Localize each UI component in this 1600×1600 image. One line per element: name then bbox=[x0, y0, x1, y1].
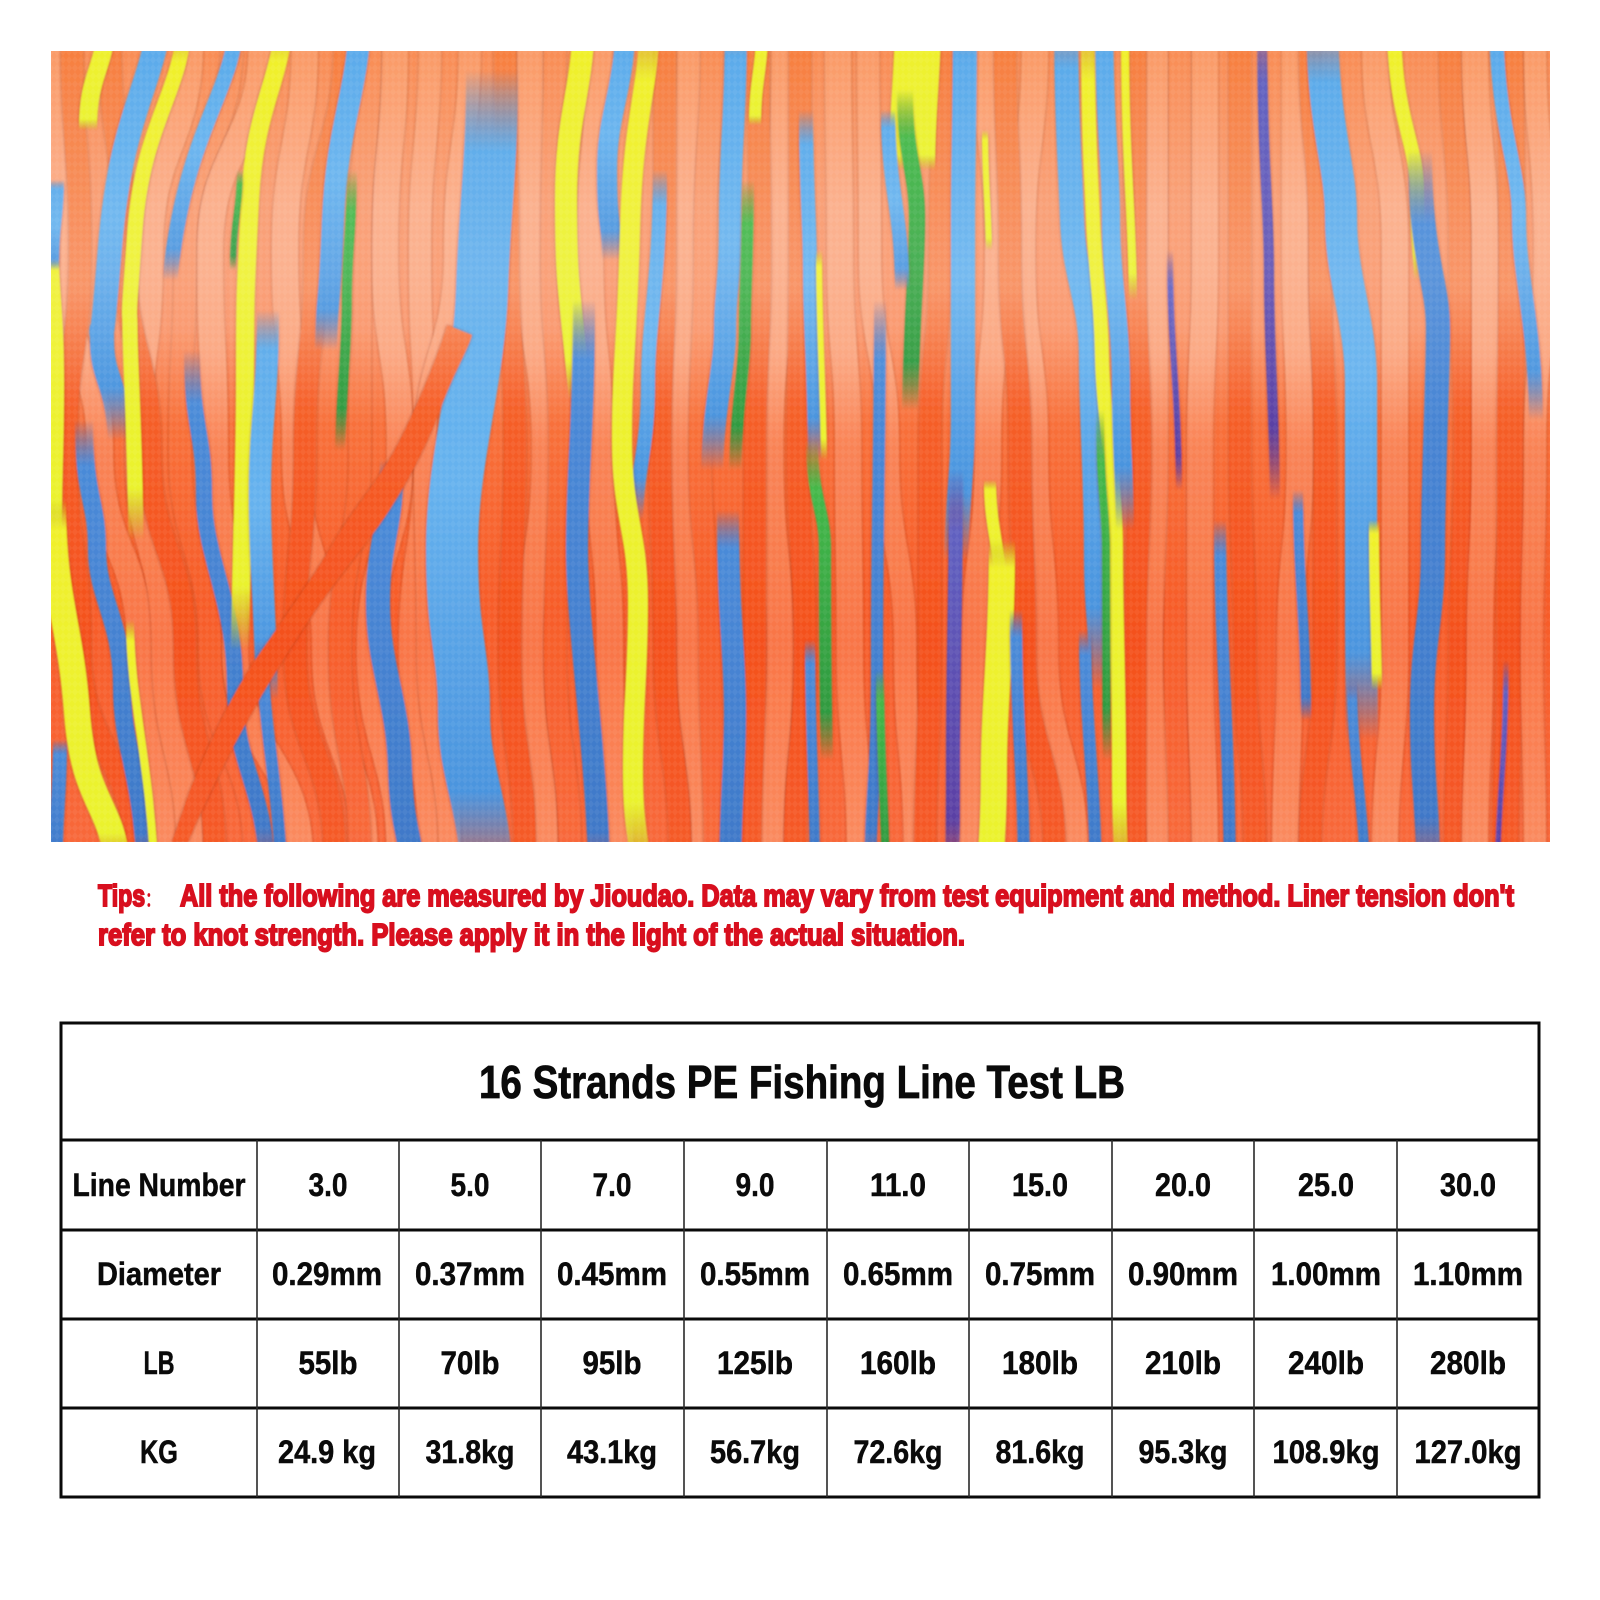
row: line number: 20.0 bbox=[1155, 1167, 1211, 1203]
row: kilograms: KG bbox=[140, 1434, 178, 1470]
row: kilograms bbox=[140, 1434, 1522, 1470]
row: line number: 30.0 bbox=[1440, 1167, 1496, 1203]
row: line number: 5.0 bbox=[450, 1167, 490, 1203]
row: kilograms: 31.8kg bbox=[426, 1434, 514, 1470]
row: pounds: 160lb bbox=[860, 1345, 936, 1381]
row: pounds: 180lb bbox=[1002, 1345, 1078, 1381]
row: diameter: 0.65mm bbox=[843, 1256, 953, 1292]
specification table bbox=[61, 1023, 1539, 1497]
row: kilograms: 108.9kg bbox=[1272, 1434, 1380, 1470]
row: diameter: 1.10mm bbox=[1413, 1256, 1523, 1292]
row: kilograms: 56.7kg bbox=[710, 1434, 800, 1470]
row: line number: 11.0 bbox=[870, 1167, 926, 1203]
row: diameter: 0.90mm bbox=[1128, 1256, 1238, 1292]
row: pounds: 280lb bbox=[1430, 1345, 1506, 1381]
tips note in red: Tips： bbox=[98, 878, 160, 913]
row: kilograms: 95.3kg bbox=[1138, 1434, 1228, 1470]
row: line number: Line Number bbox=[72, 1167, 246, 1203]
row: line number: 25.0 bbox=[1298, 1167, 1354, 1203]
row: line number: 9.0 bbox=[736, 1167, 774, 1203]
tips note in red: refer to knot strength. Please apply it in the light of the actual situation. bbox=[98, 917, 965, 952]
row: diameter: 0.37mm bbox=[415, 1256, 525, 1292]
blue, yellow and green strands bbox=[51, 51, 1544, 842]
row: line number: 7.0 bbox=[592, 1167, 632, 1203]
row: diameter bbox=[97, 1256, 1523, 1292]
row: diameter: 0.75mm bbox=[985, 1256, 1095, 1292]
row: pounds: 55lb bbox=[298, 1345, 358, 1381]
table title: 16 Strands PE Fishing Line Test LB bbox=[479, 1056, 1125, 1108]
row: pounds: 240lb bbox=[1288, 1345, 1364, 1381]
row: diameter: 0.55mm bbox=[700, 1256, 810, 1292]
weave texture bbox=[51, 51, 1550, 842]
row: pounds bbox=[144, 1345, 1506, 1381]
row: diameter: 0.29mm bbox=[272, 1256, 382, 1292]
row: kilograms: 127.0kg bbox=[1414, 1434, 1522, 1470]
row: diameter: Diameter bbox=[97, 1256, 221, 1292]
sheen bbox=[51, 140, 1550, 366]
row: diameter: 1.00mm bbox=[1271, 1256, 1381, 1292]
row: pounds: 210lb bbox=[1145, 1345, 1221, 1381]
row: diameter: 0.45mm bbox=[557, 1256, 667, 1292]
row: kilograms: 72.6kg bbox=[854, 1434, 942, 1470]
row: pounds: LB bbox=[144, 1345, 174, 1381]
photo: spool of multicolour braided fishing line bbox=[51, 51, 1550, 842]
row: line number: 3.0 bbox=[308, 1167, 348, 1203]
row: line number bbox=[72, 1167, 1496, 1203]
crossing strand bbox=[172, 325, 472, 842]
row: kilograms: 24.9 kg bbox=[278, 1434, 376, 1470]
tips note in red bbox=[98, 878, 1514, 952]
row: pounds: 95lb bbox=[582, 1345, 642, 1381]
row: kilograms: 81.6kg bbox=[996, 1434, 1084, 1470]
row: line number: 15.0 bbox=[1012, 1167, 1068, 1203]
orange strands bbox=[58, 40, 1545, 860]
row: pounds: 125lb bbox=[717, 1345, 793, 1381]
row: kilograms: 43.1kg bbox=[567, 1434, 657, 1470]
row: pounds: 70lb bbox=[440, 1345, 500, 1381]
